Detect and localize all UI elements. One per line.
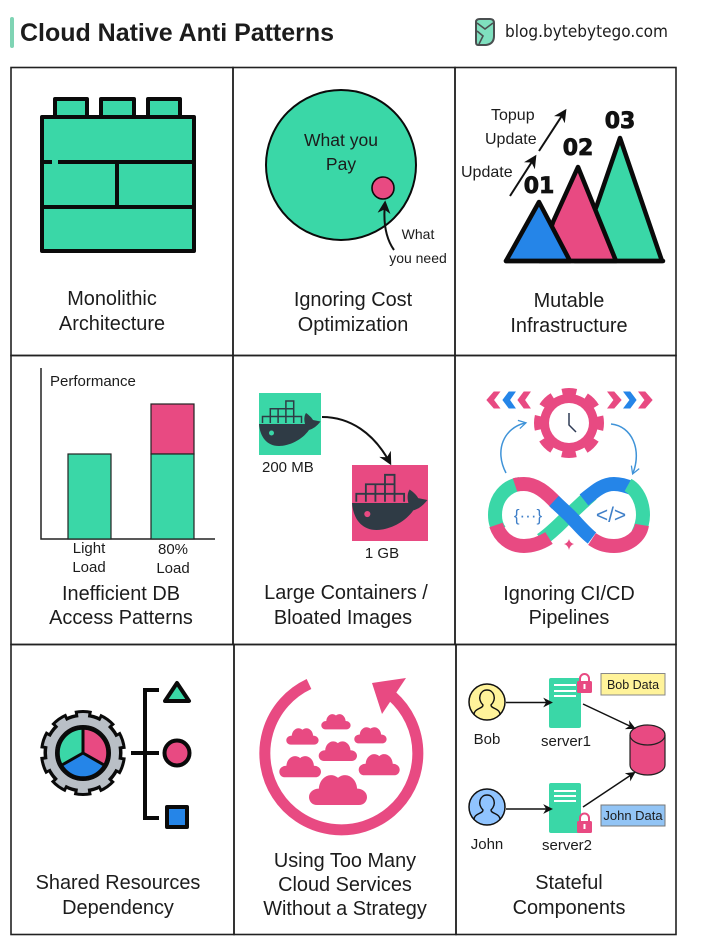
labels: 01 02 03 <box>524 109 635 199</box>
label: what you need: What <box>402 226 434 242</box>
panel: inefficient db access <box>11 356 233 644</box>
label: too many cloud services: Using Too Many <box>274 850 416 872</box>
arrows: request flow <box>506 702 634 809</box>
label: 1 GB: 1 GB <box>365 545 399 562</box>
label: stateful: Stateful <box>535 872 603 894</box>
label: shared resources: Shared Resources <box>36 872 200 894</box>
arrow: grows to <box>322 417 390 463</box>
label: mutable: Mutable <box>534 290 604 312</box>
icon: user john <box>469 789 505 825</box>
icon: code brackets: {···} <box>514 506 542 525</box>
panel: mutable infrastructure <box>455 68 676 356</box>
icon: circle <box>164 740 190 766</box>
chart: performance bars: 80% <box>158 541 188 558</box>
panel: too many cloud services <box>234 644 456 934</box>
icon: triangle <box>165 683 189 701</box>
label: bob: Bob <box>474 731 500 748</box>
panel: large containers <box>233 356 455 644</box>
label: too many cloud services: Without a Strategy <box>263 898 427 920</box>
arrows: loop <box>501 423 636 473</box>
icon: docker 200 MB <box>259 393 321 455</box>
labels: update text <box>461 107 537 181</box>
label: what you need: you need <box>389 250 447 266</box>
panel: stateful components <box>456 644 676 934</box>
icon: code brackets: </> <box>596 504 626 527</box>
panel: ignoring cost optimization <box>233 68 455 356</box>
label: 200 MB: 200 MB <box>262 459 314 476</box>
chart: performance bars: Load <box>72 559 106 576</box>
callout: bob data <box>601 674 665 695</box>
label: ignoring cost: Ignoring Cost <box>294 289 412 311</box>
labels: 01 02 03: 02 <box>563 136 593 161</box>
label: shared resources: Dependency <box>62 897 174 919</box>
label: too many cloud services: Cloud Services <box>278 874 412 896</box>
icon: server2 <box>549 783 592 833</box>
label: server2: server2 <box>542 837 592 854</box>
panel: monolithic architecture <box>11 68 233 356</box>
logo: blog.bytebytego.com <box>476 19 668 45</box>
icon: clock gear <box>538 392 600 454</box>
label: large containers: Bloated Images <box>274 607 412 629</box>
arrow: what you need <box>384 203 394 250</box>
callout: bob data: Bob Data <box>607 678 659 692</box>
labels: update text: Update <box>485 131 537 148</box>
chart: what you pay circle: What you <box>304 130 378 150</box>
icon: infinity loop <box>495 484 643 546</box>
icon: clouds <box>279 714 400 805</box>
icon: square <box>167 807 187 827</box>
label: large containers: Large Containers / <box>264 582 428 604</box>
callout: john data <box>601 805 665 826</box>
label: john: John <box>471 836 503 853</box>
icon: docker 1 GB <box>352 465 428 541</box>
labels: update text: Update <box>461 164 513 181</box>
label: monolithic: Architecture <box>59 313 165 335</box>
chart: performance bars: Performance <box>50 373 136 390</box>
label: ci/cd: Ignoring CI/CD <box>503 583 635 605</box>
icon: server1 <box>549 674 592 728</box>
icon: circular arrow <box>265 678 418 830</box>
chart: what you pay circle: Pay <box>326 154 356 174</box>
label: inefficient db: Inefficient DB <box>62 583 180 605</box>
panel: shared resources <box>11 644 234 934</box>
logo: blog.bytebytego.com: blog.bytebytego.com <box>505 22 668 41</box>
icon: three mountains <box>506 138 663 261</box>
label: ignoring cost: Optimization <box>298 314 408 336</box>
label: ci/cd: Pipelines <box>529 607 609 629</box>
arrows: updates <box>510 111 565 196</box>
label: monolithic: Monolithic <box>67 288 157 310</box>
icon: gear with pie <box>45 715 121 791</box>
label: inefficient db: Access Patterns <box>49 607 193 629</box>
callout: john data: John Data <box>603 808 663 823</box>
chart: performance bars <box>41 368 215 577</box>
chart: performance bars: Light <box>73 540 105 557</box>
labels: 01 02 03: 03 <box>605 109 635 134</box>
labels: update text: Topup <box>491 107 535 124</box>
chart: what you pay circle <box>266 90 416 240</box>
title: Cloud Native Anti Patterns <box>20 19 334 47</box>
icon: user bob <box>469 684 505 720</box>
diagram: branching connector <box>131 690 159 818</box>
icon: chevrons <box>487 392 652 408</box>
icon: code brackets <box>514 504 626 527</box>
chart: performance bars: Load <box>156 560 190 577</box>
labels: 01 02 03: 01 <box>524 174 554 199</box>
label: server1: server1 <box>541 733 591 750</box>
panel: ignoring ci/cd <box>455 356 676 644</box>
icon: database <box>630 725 665 775</box>
icon: lego brick <box>42 99 194 251</box>
label: mutable: Infrastructure <box>510 315 628 337</box>
label: stateful: Components <box>513 897 625 919</box>
icon: sparkle <box>564 539 574 550</box>
